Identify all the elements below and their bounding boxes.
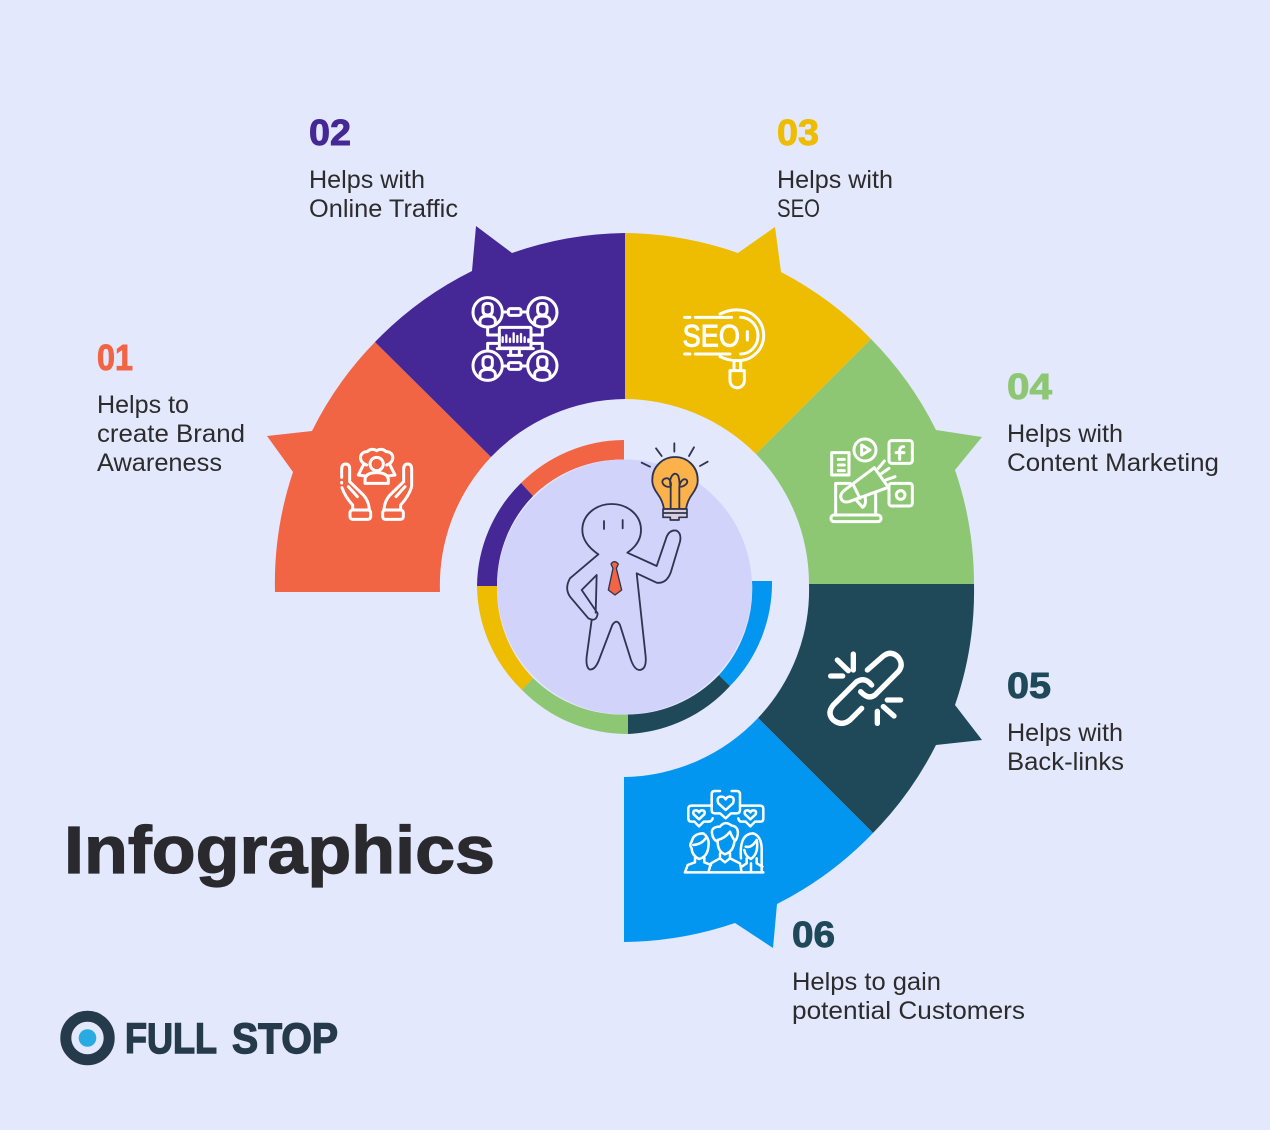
- ring arc: purple: [477, 483, 533, 586]
- item 05 text: [1007, 665, 1124, 776]
- description 01: Helps to: [97, 391, 189, 419]
- item 03 text: [777, 112, 893, 223]
- description 05: Back-links: [1007, 748, 1124, 776]
- description 04: [1007, 420, 1219, 477]
- segment 06: blue: [624, 718, 873, 948]
- logo wordmark: FULL: [125, 1015, 217, 1063]
- segment 01: orange: [267, 342, 491, 592]
- number 06: 06: [792, 914, 835, 955]
- segment 02: purple: [375, 226, 625, 457]
- ring arc: yellow: [477, 586, 533, 690]
- description 02: Helps with: [309, 166, 425, 194]
- item 01 text: [97, 337, 245, 477]
- description 03: SEO: [777, 195, 820, 223]
- segment 03: yellow: [625, 227, 871, 454]
- description 04: Helps with: [1007, 420, 1123, 448]
- number 05: 05: [1007, 665, 1051, 706]
- eyes: [604, 520, 623, 529]
- figure arm: [567, 554, 598, 620]
- description 06: Helps to gain: [792, 968, 941, 996]
- number 01: 01: [97, 337, 133, 378]
- description 05: Helps with: [1007, 719, 1123, 747]
- description 01: [97, 391, 245, 477]
- description 01: Awareness: [97, 449, 222, 477]
- central progress ring: [477, 440, 772, 734]
- ring arc: blue: [719, 581, 772, 686]
- icon: light bulb: [642, 443, 708, 520]
- description 02: Online Traffic: [309, 195, 458, 223]
- icon: SEO magnifier: [683, 310, 764, 388]
- title: Infographics: [64, 813, 495, 888]
- icon: networked people and dashboard: [473, 298, 557, 380]
- description 05: [1007, 719, 1124, 776]
- icon: SEO magnifier: SEO: [683, 318, 740, 354]
- central disk: [497, 460, 752, 714]
- ring arc: green: [522, 678, 628, 734]
- description 01: create Brand: [97, 420, 245, 448]
- item 06 text: [792, 914, 1025, 1025]
- logo wordmark: STOP: [232, 1015, 338, 1063]
- icon: broken link: [830, 653, 901, 723]
- icon: hands holding people: [342, 449, 412, 519]
- icon: people with hearts: [685, 791, 763, 872]
- description 06: potential Customers: [792, 997, 1025, 1025]
- ring arc: dark teal: [628, 675, 730, 734]
- description 03: Helps with: [777, 166, 893, 194]
- description 03: [777, 166, 893, 223]
- segment 04: green: [756, 339, 982, 584]
- logo: Full Stop: [66, 1015, 338, 1063]
- figure with tie and light bulb: [567, 443, 708, 670]
- number 03: 03: [777, 112, 819, 153]
- number 02: 02: [309, 112, 351, 153]
- icon: content marketing megaphone: [831, 439, 912, 522]
- tie: [608, 562, 622, 595]
- item 04 text: [1007, 366, 1219, 477]
- logo mark: [66, 1016, 109, 1060]
- segment 05: dark teal: [758, 584, 982, 833]
- description 04: Content Marketing: [1007, 449, 1219, 477]
- segmented radial diagram: [267, 226, 982, 948]
- item 02 text: [309, 112, 458, 223]
- number 04: 04: [1007, 366, 1052, 407]
- ring arc: orange: [521, 440, 624, 496]
- description 06: [792, 968, 1025, 1025]
- figure body: [582, 504, 680, 670]
- description 02: [309, 166, 458, 223]
